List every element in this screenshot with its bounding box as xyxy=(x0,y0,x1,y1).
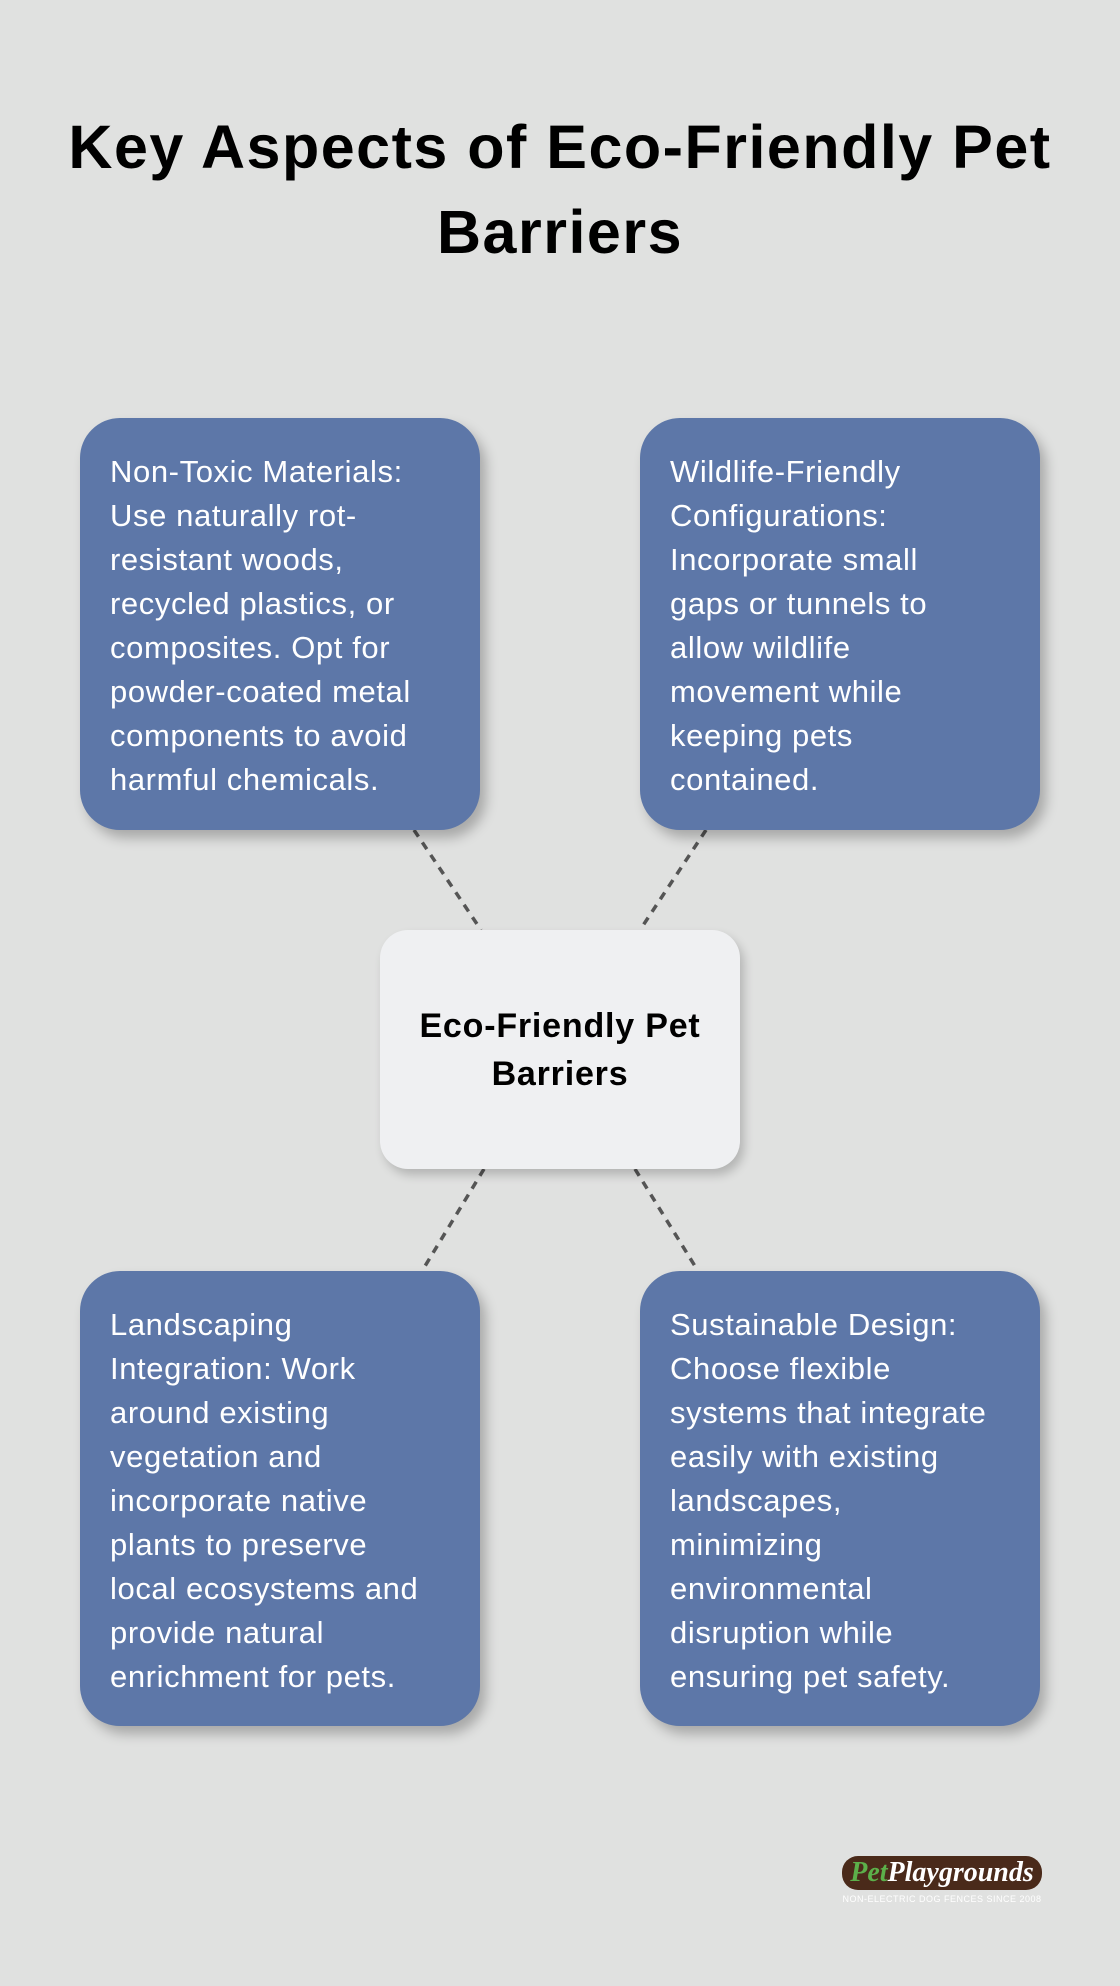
panel: wildlife-friendly xyxy=(640,418,1040,830)
panel: landscaping: enrichment for pets. xyxy=(110,1659,396,1694)
panel: non-toxic materials: components to avoid xyxy=(110,718,407,753)
panel: non-toxic materials: composites. Opt for xyxy=(110,630,390,665)
panel: sustainable design: Sustainable Design: xyxy=(670,1307,957,1342)
title: Barriers xyxy=(437,198,683,266)
title xyxy=(68,113,1052,266)
panel: sustainable design: environmental xyxy=(670,1571,873,1606)
panel: landscaping: around existing xyxy=(110,1395,329,1430)
panel: sustainable design xyxy=(640,1271,1040,1726)
panel: landscaping: Landscaping xyxy=(110,1307,292,1342)
panel: sustainable design: landscapes, xyxy=(670,1483,842,1518)
panel: landscaping: Integration: Work xyxy=(110,1351,356,1386)
center node: Eco-Friendly Pet xyxy=(419,1006,701,1044)
panel: wildlife-friendly: Wildlife-Friendly xyxy=(670,454,901,489)
panel: landscaping: vegetation and xyxy=(110,1439,322,1474)
panel: sustainable design: disruption while xyxy=(670,1615,893,1650)
panel: wildlife-friendly: gaps or tunnels to xyxy=(670,586,927,621)
panel: wildlife-friendly: keeping pets xyxy=(670,718,853,753)
panel: non-toxic materials xyxy=(80,418,480,830)
panel: non-toxic materials: harmful chemicals. xyxy=(110,762,379,797)
panel: landscaping: local ecosystems and xyxy=(110,1571,418,1606)
center node: Barriers xyxy=(492,1054,628,1092)
panel: non-toxic materials: Use naturally rot- xyxy=(110,498,357,533)
panel: sustainable design: easily with existing xyxy=(670,1439,939,1474)
panel: sustainable design: ensuring pet safety. xyxy=(670,1659,950,1694)
panel: wildlife-friendly: Incorporate small xyxy=(670,542,918,577)
panel: landscaping xyxy=(80,1271,480,1726)
logo: NON-ELECTRIC DOG FENCES SINCE 2008 xyxy=(842,1894,1042,1904)
panel: landscaping: incorporate native xyxy=(110,1483,367,1518)
title: Key Aspects of Eco-Friendly Pet xyxy=(68,113,1052,181)
panel: wildlife-friendly: movement while xyxy=(670,674,902,709)
logo: PetPlaygrounds xyxy=(850,1857,1034,1888)
logo xyxy=(842,1856,1042,1904)
panel: wildlife-friendly: allow wildlife xyxy=(670,630,851,665)
panel: non-toxic materials: recycled plastics, or xyxy=(110,586,395,621)
panel: landscaping: provide natural xyxy=(110,1615,324,1650)
panel: wildlife-friendly: contained. xyxy=(670,762,819,797)
panel: non-toxic materials: resistant woods, xyxy=(110,542,344,577)
panel: wildlife-friendly: Configurations: xyxy=(670,498,888,533)
panel: sustainable design: systems that integrate xyxy=(670,1395,986,1430)
center node xyxy=(380,930,740,1169)
panel: sustainable design: Choose flexible xyxy=(670,1351,891,1386)
panel: landscaping: plants to preserve xyxy=(110,1527,367,1562)
panel: sustainable design: minimizing xyxy=(670,1527,822,1562)
panel: non-toxic materials: powder-coated metal xyxy=(110,674,411,709)
panel: non-toxic materials: Non-Toxic Materials: xyxy=(110,454,403,489)
